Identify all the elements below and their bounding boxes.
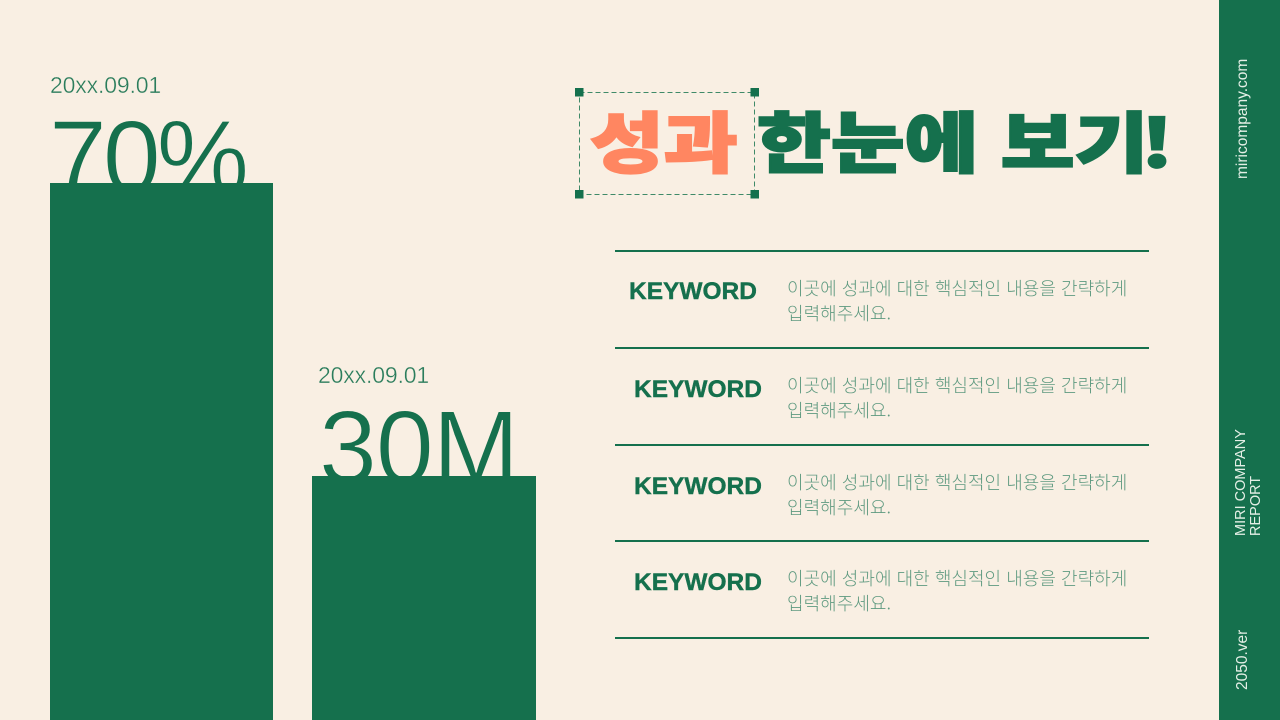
keyword row 4 description (787, 565, 1127, 616)
keyword row 3 description: 이곳에 성과에 대한 핵심적인 내용을 간략하게 (787, 469, 1127, 495)
keyword row 3 description: 입력해주세요. (787, 494, 891, 520)
keyword row 2 description: 이곳에 성과에 대한 핵심적인 내용을 간략하게 (787, 372, 1127, 398)
divider (615, 540, 1149, 542)
keyword row 4 label: KEYWORD (634, 569, 762, 596)
date label: second bar: 20xx.09.01 (318, 362, 429, 388)
bar: second value (312, 476, 536, 720)
keyword row 4 description: 입력해주세요. (787, 590, 891, 616)
keyword row 3 description (787, 469, 1127, 520)
divider (615, 347, 1149, 349)
keyword row 1 description: 이곳에 성과에 대한 핵심적인 내용을 간략하게 (787, 275, 1127, 301)
sidebar text: report name (1233, 429, 1264, 536)
sidebar (1219, 0, 1280, 720)
divider (615, 250, 1149, 252)
date label: first bar: 20xx.09.01 (50, 72, 161, 98)
keyword row 1 description: 입력해주세요. (787, 300, 891, 326)
sidebar text: report name: MIRI COMPANY (1233, 429, 1249, 536)
sidebar text: report name: REPORT (1248, 476, 1264, 536)
keyword row 2 description (787, 372, 1127, 423)
keyword row 2 description: 입력해주세요. (787, 397, 891, 423)
keyword row 1 label: KEYWORD (629, 278, 757, 305)
sidebar text: website: miricompany.com (1234, 59, 1251, 179)
keyword row 4 description: 이곳에 성과에 대한 핵심적인 내용을 간략하게 (787, 565, 1127, 591)
big number: 70%: 70% (49, 100, 245, 216)
bar: first value (50, 183, 273, 720)
title: highlighted word: 성과 (590, 91, 738, 187)
big number: 30M: 30M (319, 390, 518, 506)
selection frame around highlighted title word (575, 88, 759, 198)
sidebar text: version: 2050.ver (1234, 630, 1251, 690)
divider (615, 444, 1149, 446)
divider (615, 637, 1149, 639)
title: remaining words: 한눈에 보기! (757, 91, 1173, 187)
keyword row 2 label: KEYWORD (634, 376, 762, 403)
keyword row 1 description (787, 275, 1127, 326)
keyword row 3 label: KEYWORD (634, 473, 762, 500)
